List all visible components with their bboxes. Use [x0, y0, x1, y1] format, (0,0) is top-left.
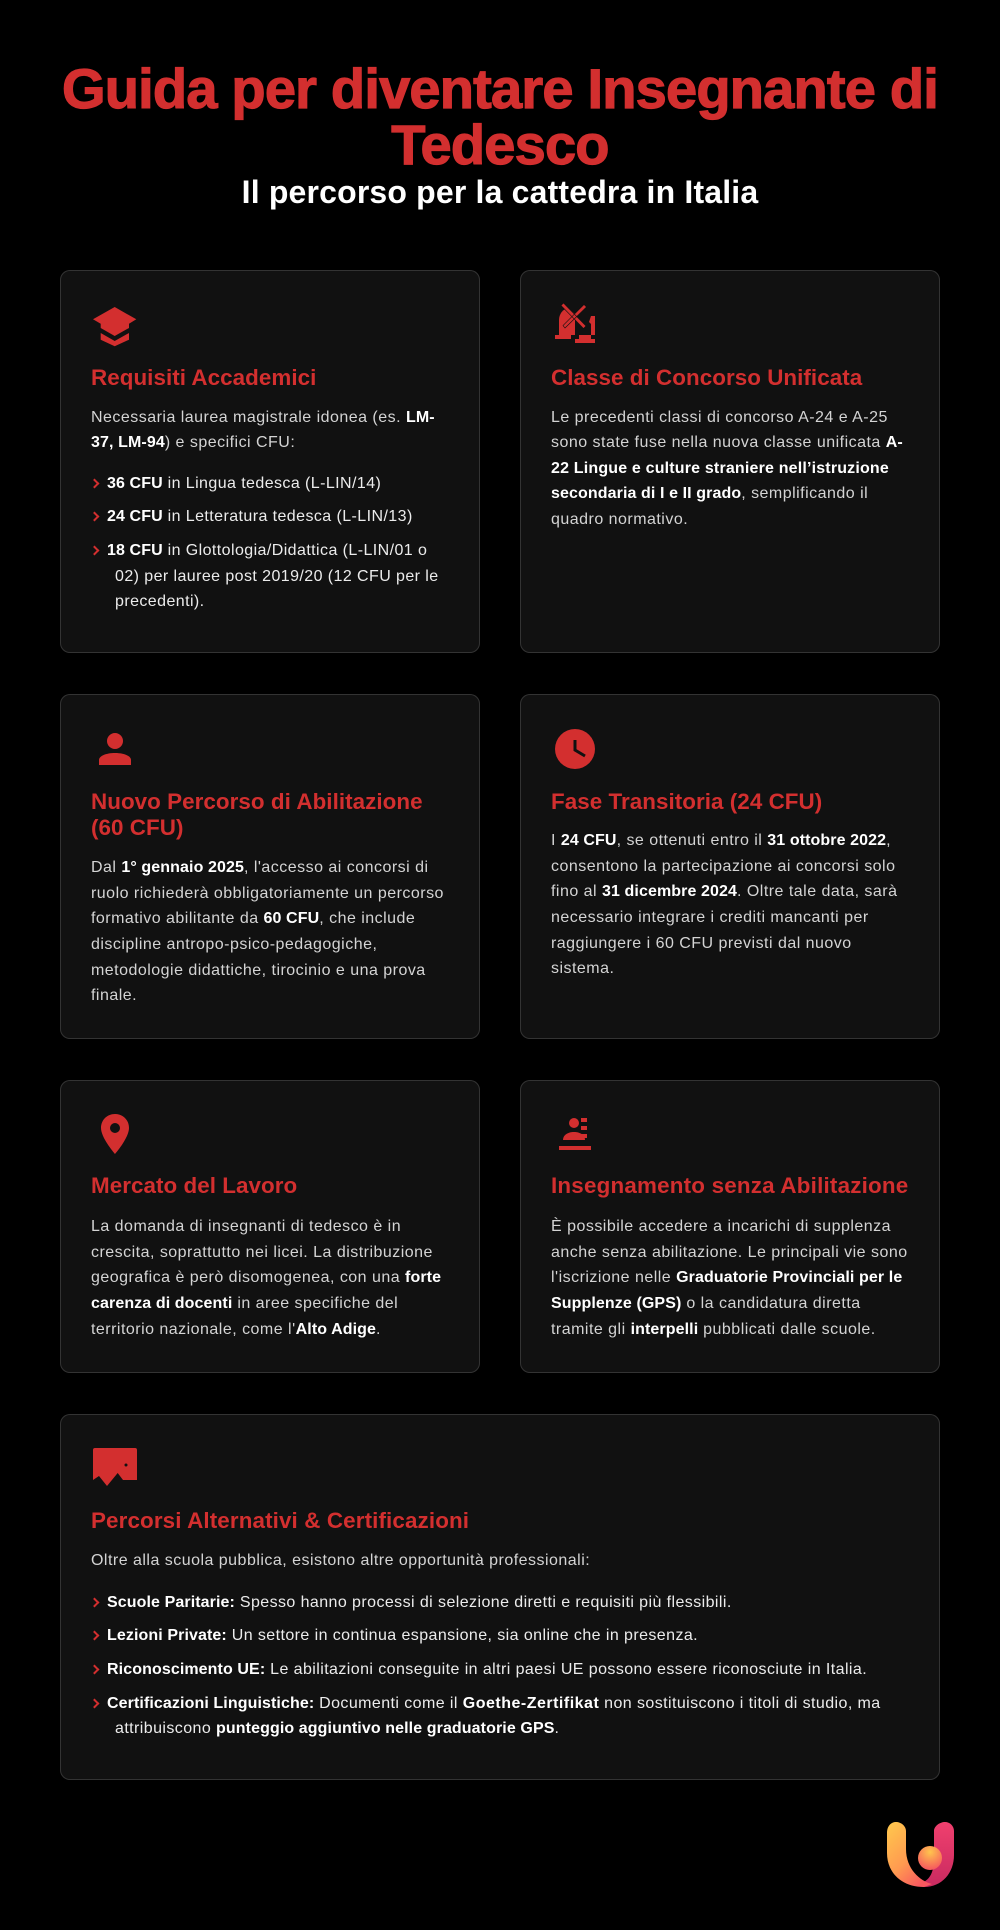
heading: Nuovo Percorso di Abilitazione	[91, 789, 423, 814]
body text: raggiungere i 60 CFU previsti dal nuovo	[551, 935, 852, 952]
panel: fase transitoria	[520, 694, 940, 1039]
body text: tramite gli interpelli pubblicati dalle scuole.	[551, 1321, 876, 1338]
body text: I 24 CFU, se ottenuti entro il 31 ottobre 2022,	[551, 832, 891, 849]
icon: map pin	[101, 1114, 129, 1154]
title: Tedesco	[391, 113, 609, 176]
icon: clock	[555, 729, 595, 769]
logo	[887, 1822, 954, 1887]
body text	[91, 859, 444, 1004]
title	[62, 57, 938, 176]
intro text: Necessaria laurea magistrale idonea (es. LM-	[91, 409, 435, 426]
list: alternatives: Certificazioni Linguistiche: Documenti come il Goethe-Zertifikat non sostituiscono i titoli di studio, ma	[107, 1695, 881, 1712]
intro text	[91, 409, 435, 451]
heading: Fase Transitoria (24 CFU)	[551, 789, 822, 814]
body text: carenza di docenti in aree specifiche del	[91, 1295, 398, 1312]
body text: crescita, soprattutto nei licei. La distribuzione	[91, 1244, 433, 1261]
body text: l'iscrizione nelle Graduatorie Provinciali per le	[551, 1269, 902, 1286]
panel: insegnamento senza abilitazione	[520, 1080, 940, 1373]
body text	[551, 1217, 908, 1338]
body text: sono state fuse nella nuova classe unificata A-	[551, 434, 903, 451]
body text: quadro normativo.	[551, 511, 688, 528]
list: CFU: 18 CFU in Glottologia/Didattica (L-LIN/01 o	[107, 542, 427, 559]
icon: certificate banner	[93, 1448, 137, 1486]
body text: fino al 31 dicembre 2024. Oltre tale data, sarà	[551, 883, 897, 900]
icon: person	[99, 733, 131, 765]
title: Guida per diventare Insegnante di	[62, 57, 938, 120]
body text: finale.	[91, 987, 137, 1004]
body text: necessario integrare i crediti mancanti per	[551, 909, 869, 926]
body text: geografica è però disomogenea, con una forte	[91, 1269, 441, 1286]
list: alternatives: Lezioni Private: Un settore in continua espansione, sia online che in presenza.	[107, 1627, 698, 1644]
body text: Le precedenti classi di concorso A-24 e A-25	[551, 409, 888, 426]
heading: Mercato del Lavoro	[91, 1173, 297, 1198]
body text: discipline antropo-psico-pedagogiche,	[91, 936, 377, 953]
icon: graduation cap	[93, 307, 136, 346]
icon: person with list	[559, 1118, 591, 1150]
body text: Supplenze (GPS) o la candidatura diretta	[551, 1295, 861, 1312]
heading: Classe di Concorso Unificata	[551, 365, 862, 390]
body text: La domanda di insegnanti di tedesco è in	[91, 1218, 401, 1235]
list: alternatives: attribuiscono punteggio aggiuntivo nelle graduatorie GPS.	[115, 1720, 559, 1737]
subtitle: Il percorso per la cattedra in Italia	[242, 174, 758, 210]
body text: ruolo richiederà obbligatoriamente un percorso	[91, 885, 444, 902]
body text: secondaria di I e II grado, semplificando il	[551, 485, 868, 502]
body text	[91, 1218, 441, 1338]
icon: windmill	[555, 304, 595, 343]
list: alternatives: Riconoscimento UE: Le abilitazioni conseguite in altri paesi UE possono essere riconosciute in Italia.	[107, 1661, 867, 1678]
body text: È possibile accedere a incarichi di supplenza	[551, 1218, 891, 1235]
body text: 22 Lingue e culture straniere nell’istruzione	[551, 460, 889, 477]
list: alternatives: Scuole Paritarie: Spesso hanno processi di selezione diretti e requisiti più flessibili.	[107, 1594, 732, 1611]
body text: sistema.	[551, 960, 614, 977]
body text: formativo abilitante da 60 CFU, che include	[91, 910, 415, 927]
heading: Insegnamento senza Abilitazione	[551, 1173, 908, 1198]
heading: Requisiti Accademici	[91, 365, 316, 390]
heading: Percorsi Alternativi & Certificazioni	[91, 1508, 469, 1533]
body text: territorio nazionale, come l'Alto Adige.	[91, 1321, 381, 1338]
body text	[551, 409, 903, 528]
body text: anche senza abilitazione. Le principali vie sono	[551, 1244, 908, 1261]
intro text: Oltre alla scuola pubblica, esistono altre opportunità professionali:	[91, 1552, 590, 1569]
intro text: 37, LM-94) e specifici CFU:	[91, 434, 295, 451]
body text: metodologie didattiche, tirocinio e una prova	[91, 962, 426, 979]
body text: Dal 1° gennaio 2025, l'accesso ai concorsi di	[91, 859, 428, 876]
panel: nuovo percorso	[60, 694, 480, 1039]
panel: classe di concorso	[520, 270, 940, 653]
body text: consentono la partecipazione ai concorsi solo	[551, 858, 895, 875]
list: CFU: 02) per lauree post 2019/20 (12 CFU per le	[115, 568, 439, 585]
body text	[551, 832, 898, 977]
list: alternatives	[93, 1594, 881, 1737]
panel: requisiti accademici	[60, 270, 480, 653]
list: CFU: precedenti).	[115, 593, 205, 610]
list: CFU: 36 CFU in Lingua tedesca (L-LIN/14)	[107, 475, 381, 492]
panel: percorsi alternativi	[60, 1414, 940, 1780]
list: CFU: 24 CFU in Letteratura tedesca (L-LIN/13)	[107, 508, 413, 525]
panel: nuovo percorso: (60 CFU)	[91, 815, 183, 840]
panel: mercato del lavoro	[60, 1080, 480, 1373]
list: CFU	[93, 475, 439, 610]
